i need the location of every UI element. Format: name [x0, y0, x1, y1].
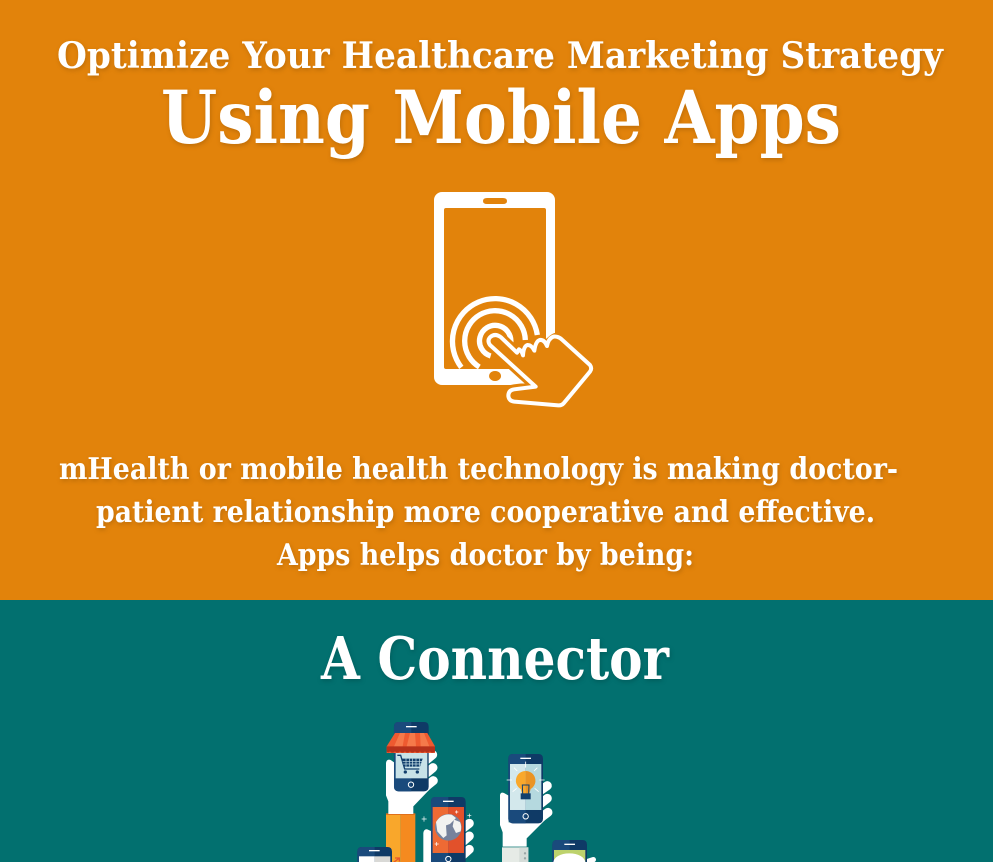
hand	[488, 335, 591, 405]
hand with globe phone	[422, 797, 471, 862]
hand halo	[488, 335, 591, 405]
illustration: hands holding phones	[357, 722, 593, 862]
icon: phone with tapping hand	[434, 192, 591, 405]
intro line 1: mHealth or mobile health technology is making doctor-	[59, 452, 898, 487]
phone body	[434, 192, 555, 385]
hand with shop phone	[386, 722, 437, 862]
intro line 2: patient relationship more cooperative and effective.	[96, 495, 875, 530]
title line 2: Using Mobile Apps	[161, 75, 841, 161]
phone bottom right	[552, 840, 593, 862]
intro line 3: Apps helps doctor by being:	[276, 538, 694, 573]
section heading: A Connector	[320, 624, 670, 693]
panel: orange intro	[0, 0, 993, 600]
hand with light bulb phone	[500, 754, 551, 862]
intro paragraph	[59, 452, 898, 573]
title line 1: Optimize Your Healthcare Marketing Strategy	[57, 35, 944, 77]
title	[57, 35, 944, 161]
panel: a connector	[0, 600, 993, 862]
phone bottom left	[357, 847, 399, 862]
touch rings	[452, 299, 537, 367]
